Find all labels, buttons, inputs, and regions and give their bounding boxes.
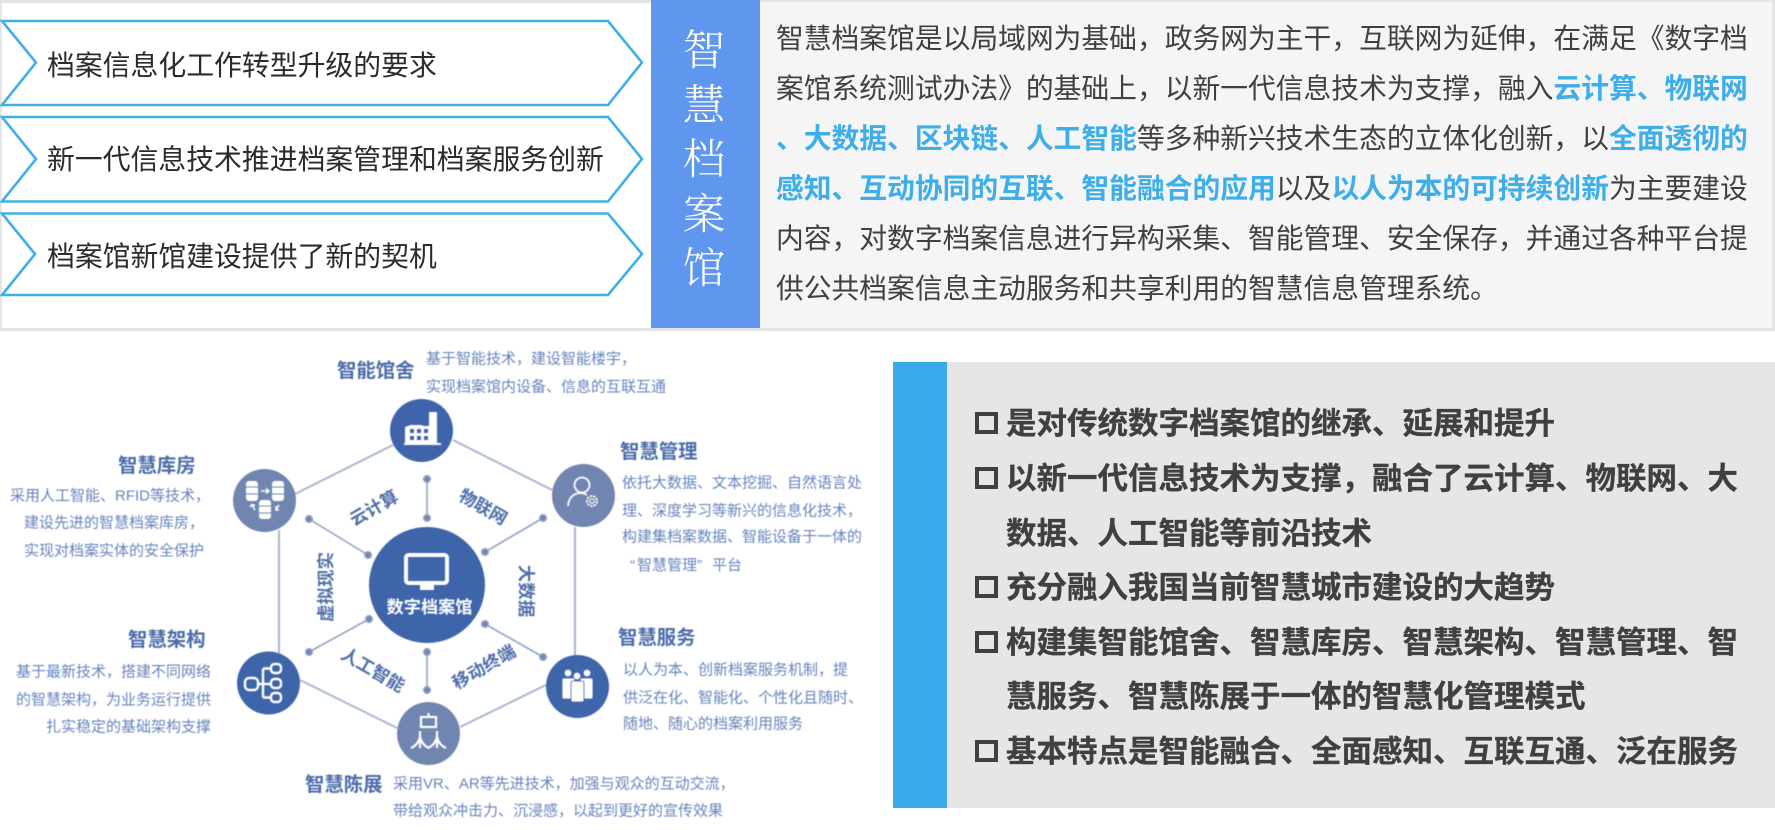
definition paragraph: 内容，对数字档案信息进行异构采集、智能管理、安全保存，并通过各种平台提 [776,223,1748,254]
chevron 3 [2,214,642,295]
chevron text 2: 新一代信息技术推进档案管理和档案服务创新 [47,144,604,175]
text block: smart storage: 实现对档案实体的安全保护 [24,542,204,560]
diagram: hexagon of smart archive components [10,350,863,820]
text block: smart architecture: 智慧架构 [128,629,206,651]
feature list: 以新一代信息技术为支撑，融合了云计算、物联网、大 [1006,462,1738,496]
text block: smart management: “ [630,556,635,574]
text block: smart service: 供泛在化、智能化、个性化且随时、 [623,688,863,706]
node icon: network tree [237,652,300,714]
label: cloud computing: 云计算 [346,486,402,530]
text block: smart management: 智慧管理 [620,440,698,463]
text block: smart architecture: 基于最新技术，搭建不同网络 [16,664,211,680]
text block: smart management: 构建集档案数据、智能设备于一体的 [622,528,862,546]
definition paragraph: 、大数据、区块链、人工智能等多种新兴技术生态的立体化创新，以全面透彻的 [776,123,1748,154]
definition paragraph: 智慧档案馆是以局域网为基础，政务网为主干，互联网为延伸，在满足《数字档 [776,23,1748,54]
text block: smart management: 依托大数据、文本挖掘、自然语言处 [622,474,862,492]
text block: smart building: 基于智能技术，建设智能楼宇， [426,350,636,368]
feature list: 基本特点是智能融合、全面感知、互联互通、泛在服务 [1006,735,1738,769]
panel: definition text [760,2,1772,328]
vertical title text: 智 [683,28,725,75]
vertical title text: 案 [683,192,725,239]
feature list: 构建集智能馆舍、智慧库房、智慧架构、智慧管理、智 [1006,626,1738,660]
vertical title text: 馆 [683,246,725,293]
node icon: factory [390,399,453,462]
text block: smart exhibition: 带给观众冲击力、沉浸感，以起到更好的宣传效果 [393,802,723,820]
text block: smart architecture: 扎实稳定的基础架构支撑 [46,718,211,736]
feature list [975,407,1738,769]
definition paragraph: 感知、互动协同的互联、智能融合的应用以及以人为本的可持续创新为主要建设 [776,173,1748,204]
text block: smart management: ” [697,556,702,574]
feature list: 充分融入我国当前智慧城市建设的大趋势 [1006,571,1555,605]
text block: smart management: 理、深度学习等新兴的信息化技术， [622,502,862,520]
definition paragraph: 案馆系统测试办法》的基础上，以新一代信息技术为支撑，融入云计算、物联网 [776,73,1748,104]
text block: smart service: 随地、随心的档案利用服务 [623,714,803,732]
text block: smart storage: 采用人工智能、RFID等技术， [10,486,210,504]
node icon: exhibition [397,702,460,765]
node icon: person with gear [552,464,615,527]
label: mobile terminal: 移动终端 [449,641,519,693]
definition paragraph: 供公共档案信息主动服务和共享利用的智慧信息管理系统。 [776,273,1498,304]
text block: smart service: 以人为本、创新档案服务机制，提 [623,660,848,678]
text block: smart management: 平台 [712,556,742,574]
hexagon outer lines [279,440,575,728]
text block: smart architecture [16,629,211,736]
panel: top section background [0,0,1775,331]
definition paragraph [776,23,1748,304]
chevron list [0,20,644,296]
text block: smart management: 智慧管理 [637,556,697,574]
text block: smart service [618,627,863,732]
panel: chevron area [2,3,651,328]
text block: smart architecture: 的智慧架构，为业务运行提供 [16,690,211,708]
panel: vertical title [651,0,760,328]
text block: smart exhibition: 智慧陈展 [305,773,383,796]
text block: smart storage: 智慧库房 [118,455,196,477]
text block: smart service: 智慧服务 [618,627,696,649]
chevron text 1: 档案信息化工作转型升级的要求 [47,50,437,81]
label: big data: 大数据 [516,565,536,617]
node icon: storage databases [233,469,296,532]
text block: smart building: 实现档案馆内设备、信息的互联互通 [426,378,666,396]
text block: smart storage [10,455,210,560]
text block: smart building: 智能馆舍 [337,359,415,382]
center node: digital archive [369,527,485,643]
text block: smart management [620,440,862,574]
chevron 2 [2,117,642,202]
vertical title text: 档 [683,137,725,184]
panel: features background [947,362,1775,808]
vertical title text: 慧 [683,83,725,130]
text block: smart storage: 建设先进的智慧档案库房， [24,514,204,532]
inner connectors [306,476,546,693]
chevron 1 [2,21,642,105]
text block: smart exhibition [305,773,735,820]
text block: smart exhibition: 采用VR、AR等先进技术，加强与观众的互动交流， [393,774,735,792]
panel: features accent bar [893,362,947,808]
text block: smart building [337,350,666,396]
label: artificial intelligence: 人工智能 [338,644,409,696]
chevron text 3: 档案馆新馆建设提供了新的契机 [47,241,437,272]
label: internet of things: 物联网 [455,485,511,529]
vertical title text [683,28,725,293]
feature list: 是对传统数字档案馆的继承、延展和提升 [1006,407,1555,441]
label: virtual reality: 虚拟现实 [316,552,336,622]
center node: digital archive: 数字档案馆 [387,597,472,617]
feature list: 数据、人工智能等前沿技术 [1006,517,1372,551]
feature list: 慧服务、智慧陈展于一体的智慧化管理模式 [1006,680,1586,714]
node icon: three people [546,655,609,718]
